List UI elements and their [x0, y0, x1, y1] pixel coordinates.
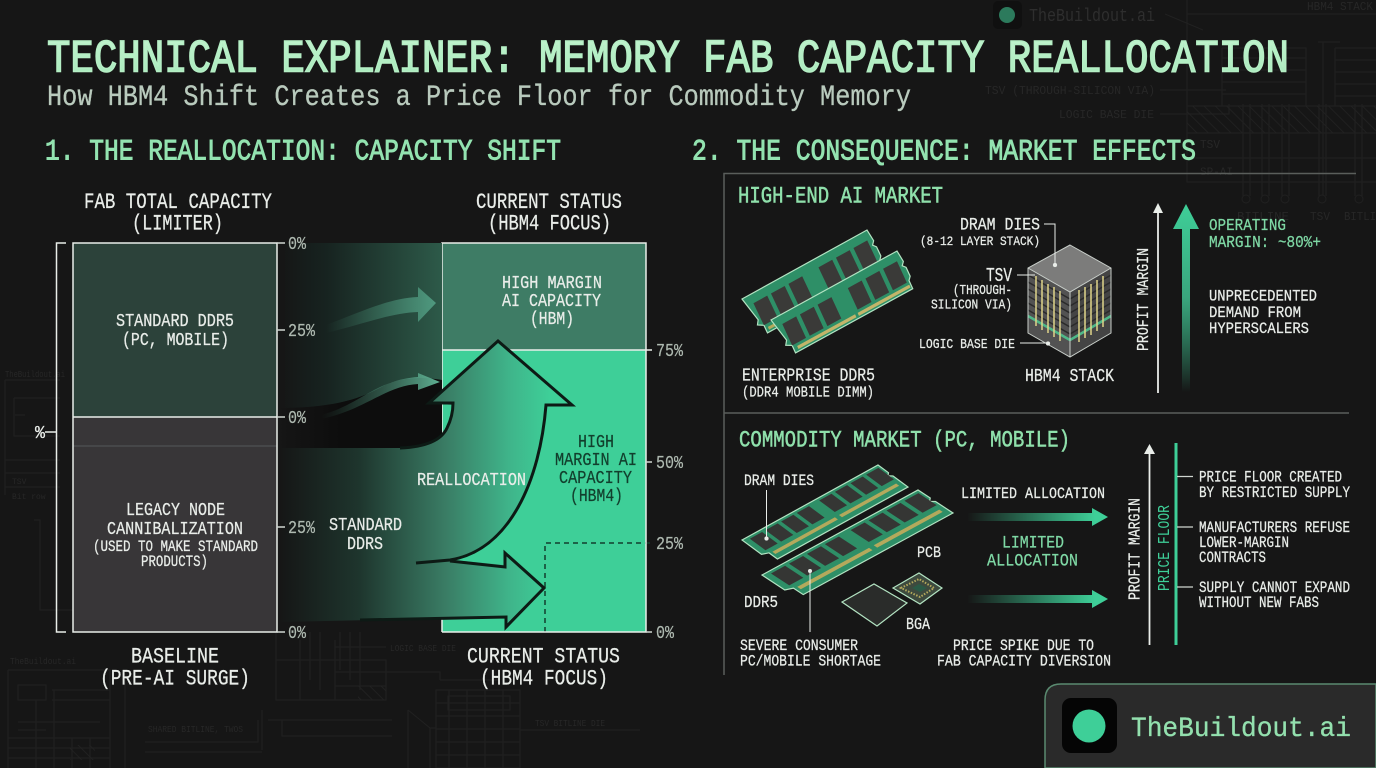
- ghost labels left: TSV: [12, 478, 27, 487]
- label: standard ddrs: DDRS: [347, 535, 383, 555]
- section heading 1: 1. THE REALLOCATION: CAPACITY SHIFT: [45, 136, 561, 170]
- label: high margin ai capacity hbm4: MARGIN AI: [555, 451, 637, 471]
- heading: commodity market: COMMODITY MARKET (PC, MOBILE): [739, 428, 1070, 454]
- heading: fab total capacity: FAB TOTAL CAPACITY: [84, 190, 272, 215]
- left axis ticks and labels: 0%: [288, 624, 306, 644]
- profit margin axis high-end: [1135, 203, 1163, 393]
- right axis labels: 50%: [656, 454, 683, 474]
- ghost labels top right: TSV: [1310, 210, 1331, 224]
- label: dram dies: [920, 216, 1057, 267]
- label: legacy node segment: CANNIBALIZATION: [107, 519, 243, 540]
- label: tsv: SILICON VIA): [931, 298, 1012, 314]
- price floor axis: [1156, 443, 1193, 645]
- label: severe consumer shortage: PC/MOBILE SHORTAGE: [740, 652, 881, 670]
- caption: enterprise ddr5: ENTERPRISE DDR5: [742, 366, 875, 386]
- logo badge: [1045, 684, 1376, 768]
- label: standard ddr5 segment: [116, 312, 234, 351]
- caption: baseline: (PRE-AI SURGE): [100, 666, 250, 692]
- label: severe consumer shortage: [740, 637, 881, 670]
- icon: logo mark: [1062, 698, 1117, 753]
- ghost labels bottom: [148, 644, 605, 735]
- label: operating margin: OPERATING: [1209, 216, 1286, 235]
- note: manufacturers refuse: LOWER-MARGIN: [1199, 534, 1289, 552]
- caption: enterprise ddr5: (DDR4 MOBILE DIMM): [742, 386, 874, 402]
- panel: market effects: [724, 174, 1356, 675]
- label: unprecedented demand: HYPERSCALERS: [1209, 320, 1309, 338]
- logo text: TheBuildout.ai: [1131, 714, 1351, 745]
- caption: current status bottom: (HBM4 FOCUS): [480, 666, 608, 692]
- label: dram dies: (8-12 LAYER STACK): [920, 234, 1040, 249]
- arrow: reallocation and standard flow: [281, 341, 572, 627]
- section heading 2: 2. THE CONSEQUENCE: MARKET EFFECTS: [692, 136, 1196, 170]
- ghost labels bottom: LOGIC BASE DIE: [390, 644, 456, 654]
- ghost labels top right: BITLINE: [1237, 210, 1289, 224]
- left axis ticks and labels: 0%: [288, 235, 306, 255]
- profit margin axis high-end: PROFIT MARGIN: [1135, 248, 1154, 351]
- ghost labels left: TheBuildout.ai: [10, 657, 76, 667]
- caption: current status bottom: [467, 644, 620, 692]
- heading: current status top: (HBM4 FOCUS): [488, 212, 611, 236]
- caption: baseline: [100, 644, 250, 692]
- icon: commodity dimms: [742, 465, 953, 598]
- ghost labels left: TheBuildout.ai: [5, 370, 65, 380]
- right axis labels: 0%: [656, 624, 674, 644]
- left axis ticks and labels: 25%: [288, 519, 315, 539]
- label: price spike: PRICE SPIKE DUE TO: [953, 637, 1094, 655]
- ghost labels top right: SP-AI: [1200, 167, 1233, 179]
- ghost labels top right: TSV: [1200, 138, 1221, 152]
- label: pcb: PCB: [917, 544, 941, 562]
- label: limited allocation green: ALLOCATION: [987, 552, 1078, 572]
- label: high margin ai capacity hbm4: [555, 433, 637, 507]
- label: standard ddrs: STANDARD: [329, 516, 402, 536]
- caption: hbm4 stack: HBM4 STACK: [1025, 367, 1114, 387]
- ghost logo: [993, 1, 1155, 29]
- label: severe consumer shortage: SEVERE CONSUMER: [740, 637, 858, 655]
- ghost labels top right: LOGIC BASE DIE: [1059, 108, 1154, 122]
- heading: high-end ai market: HIGH-END AI MARKET: [738, 184, 943, 210]
- label: unprecedented demand: DEMAND FROM: [1209, 304, 1301, 322]
- label: legacy node segment: (USED TO MAKE STANDARD: [93, 538, 258, 556]
- bracket with percent label: %: [35, 424, 45, 444]
- label: price spike: FAB CAPACITY DIVERSION: [937, 652, 1111, 670]
- panel: capacity shift chart: [35, 190, 683, 692]
- label: high margin ai capacity hbm: AI CAPACITY: [502, 292, 601, 312]
- note: price floor created: PRICE FLOOR CREATED: [1199, 468, 1342, 486]
- label: bga: BGA: [906, 615, 930, 634]
- label: tsv: (THROUGH-: [953, 283, 1012, 299]
- left axis ticks and labels: [277, 235, 315, 644]
- label: standard ddr5 segment: (PC, MOBILE): [122, 331, 229, 351]
- label: logic base die: LOGIC BASE DIE: [919, 337, 1015, 353]
- subtitle: How HBM4 Shift Creates a Price Floor for Commodity Memory: [47, 81, 911, 115]
- label: high margin ai capacity hbm4: HIGH: [578, 433, 614, 453]
- arrow: limited allocation bottom: [967, 590, 1108, 608]
- right axis labels: [656, 342, 683, 644]
- caption: baseline: BASELINE: [131, 644, 219, 670]
- ghost labels top right: [985, 0, 1376, 224]
- heading: current status top: [476, 190, 622, 236]
- icon: enterprise ddr5 dimms: [742, 229, 915, 357]
- baseline stacked bar: [73, 243, 277, 632]
- arrow: small upper curved: [326, 287, 436, 333]
- flow gradient: upper band: [285, 243, 442, 408]
- ghost labels bottom: SHARED BITLINE, TWOS: [148, 725, 243, 735]
- arrow: small lower curved: [321, 373, 440, 419]
- label: price spike: [937, 637, 1111, 670]
- ghost logo: TheBuildout.ai: [1029, 7, 1155, 27]
- left axis ticks and labels: 25%: [288, 322, 315, 342]
- label: unprecedented demand: [1209, 288, 1317, 338]
- note: supply cannot expand: WITHOUT NEW FABS: [1199, 594, 1319, 612]
- caption: enterprise ddr5: [742, 366, 875, 402]
- label: legacy node segment: [93, 500, 258, 571]
- label: ddr5: DDR5: [744, 593, 778, 612]
- bracket with percent label: [35, 243, 66, 632]
- note: manufacturers refuse: CONTRACTS: [1199, 549, 1266, 567]
- icon: hbm4 stack: [1028, 245, 1111, 357]
- ghost labels left: [5, 370, 76, 667]
- label: high margin ai capacity hbm4: (HBM4): [570, 487, 623, 507]
- arrow: operating margin: [1173, 204, 1199, 392]
- heading: fab total capacity: [84, 190, 272, 236]
- left axis ticks and labels: 0%: [288, 409, 306, 429]
- profit margin axis commodity: PROFIT MARGIN: [1126, 498, 1146, 600]
- label: high margin ai capacity hbm: HIGH MARGIN: [502, 274, 602, 294]
- dark swoosh: [278, 378, 442, 448]
- profit margin axis commodity: [1126, 444, 1155, 645]
- heading: current status top: CURRENT STATUS: [476, 190, 622, 215]
- arrow: limited allocation top: [967, 508, 1108, 526]
- note: price floor created: [1199, 468, 1350, 502]
- ghost labels left: Bit row: [12, 493, 46, 502]
- note: supply cannot expand: [1199, 579, 1350, 612]
- label: legacy node segment: PRODUCTS): [141, 553, 208, 571]
- label: standard ddrs: [329, 516, 402, 555]
- label: operating margin: MARGIN: ~80%+: [1209, 233, 1321, 252]
- label: high margin ai capacity hbm4: CAPACITY: [559, 469, 632, 489]
- label: limited allocation green: [987, 534, 1078, 572]
- label: high margin ai capacity hbm: (HBM): [530, 310, 574, 330]
- label: operating margin: [1209, 216, 1321, 252]
- label: dram dies: DRAM DIES: [960, 216, 1040, 236]
- leader: shortage: [808, 569, 812, 632]
- label: high margin ai capacity hbm: [502, 274, 602, 330]
- note: manufacturers refuse: [1199, 519, 1350, 567]
- label: reallocation: REALLOCATION: [417, 471, 526, 491]
- current status stacked bar: [442, 243, 652, 632]
- label: tsv: TSV: [986, 265, 1012, 287]
- right axis labels: 25%: [656, 535, 683, 555]
- label: legacy node segment: LEGACY NODE: [126, 500, 225, 521]
- heading: fab total capacity: (LIMITER): [132, 212, 223, 236]
- label: dram dies commodity: DRAM DIES: [744, 472, 814, 490]
- icon: bga chips: [842, 573, 942, 626]
- label: unprecedented demand: UNPRECEDENTED: [1209, 288, 1317, 306]
- label: dram dies commodity: [744, 472, 814, 540]
- right axis labels: 75%: [656, 342, 683, 362]
- ghost labels top right: TSV (THROUGH-SILICON VIA): [985, 84, 1155, 98]
- ghost labels bottom: TSV BITLINE DIE: [535, 719, 605, 729]
- caption: current status bottom: CURRENT STATUS: [467, 644, 620, 670]
- label: limited allocation white: LIMITED ALLOCATION: [961, 485, 1105, 503]
- label: tsv: [931, 265, 1035, 314]
- label: limited allocation green: LIMITED: [1002, 534, 1064, 554]
- price floor axis: PRICE FLOOR: [1156, 505, 1175, 591]
- label: standard ddr5 segment: STANDARD DDR5: [116, 312, 234, 332]
